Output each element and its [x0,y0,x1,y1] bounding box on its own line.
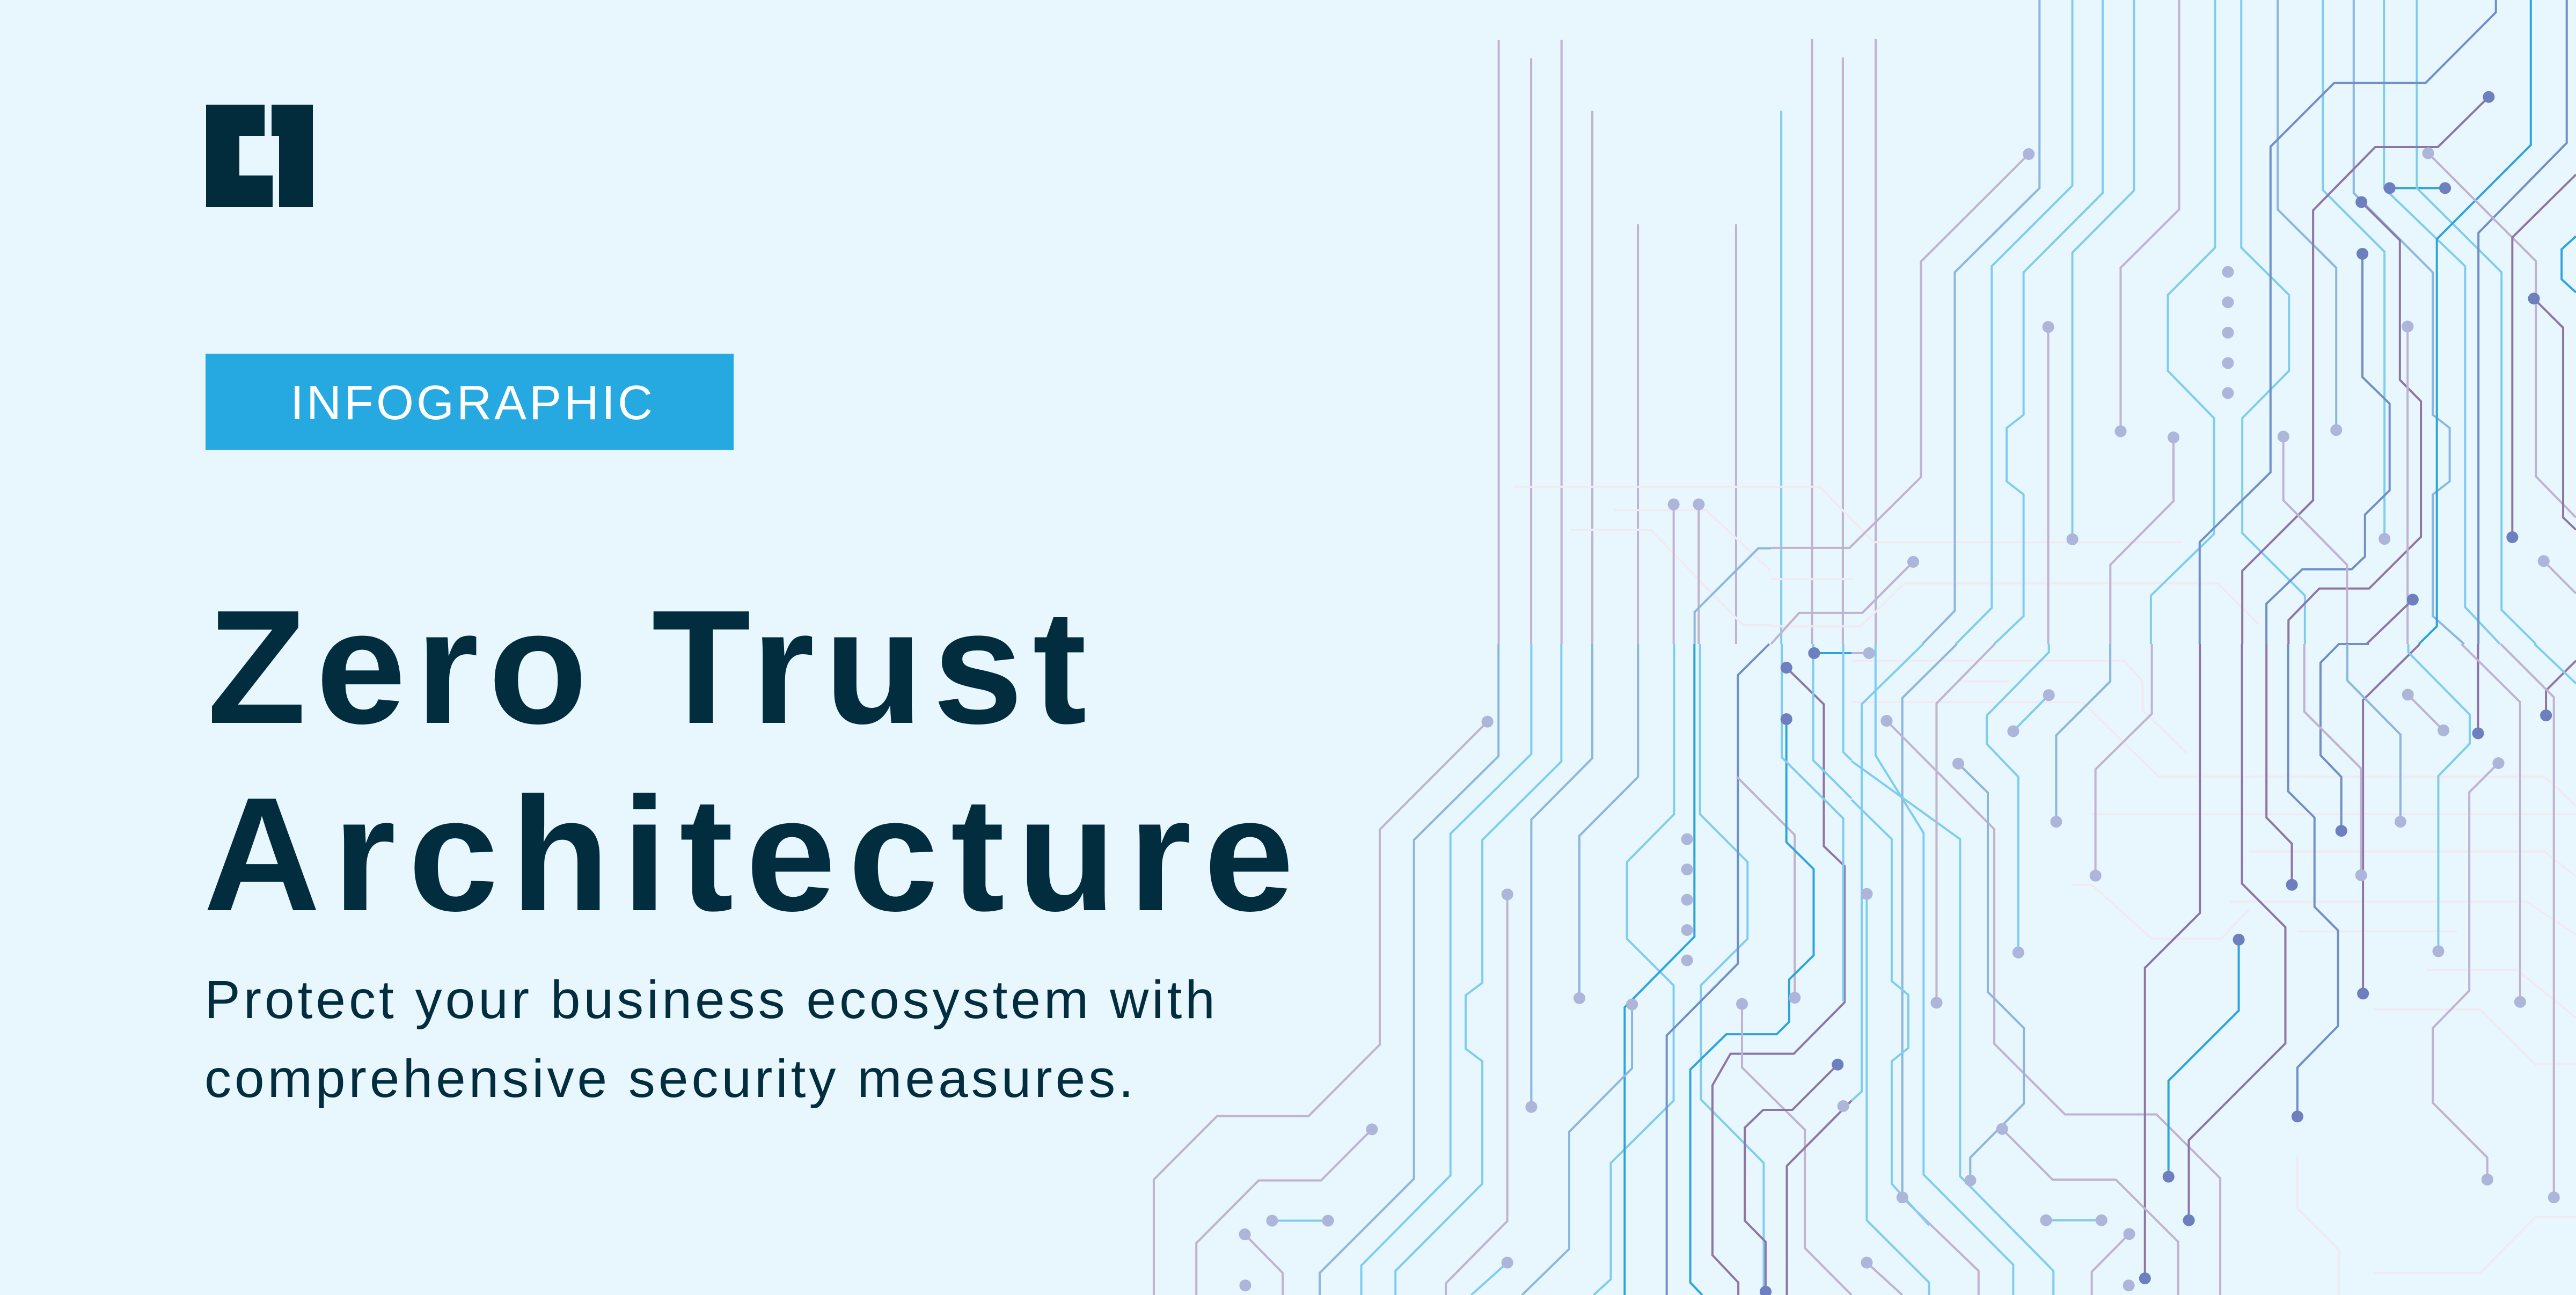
circuit: upper right block [1771,0,2576,644]
subtitle: comprehensive security measures. [204,1049,1137,1109]
logo [206,105,313,207]
subtitle [204,970,1218,1109]
circuit: lower right block [1851,644,2576,1295]
title: Zero Trust [207,576,1096,757]
circuit: lower left block [1154,644,1851,1295]
subtitle: Protect your business ecosystem with [204,970,1218,1030]
circuit: upper left block [1499,40,1771,644]
title [203,576,1306,945]
badge: INFOGRAPHIC: INFOGRAPHIC [290,376,655,430]
title: Architecture [203,764,1306,945]
circuit pattern [1154,0,2576,1295]
badge: INFOGRAPHIC [206,354,734,450]
